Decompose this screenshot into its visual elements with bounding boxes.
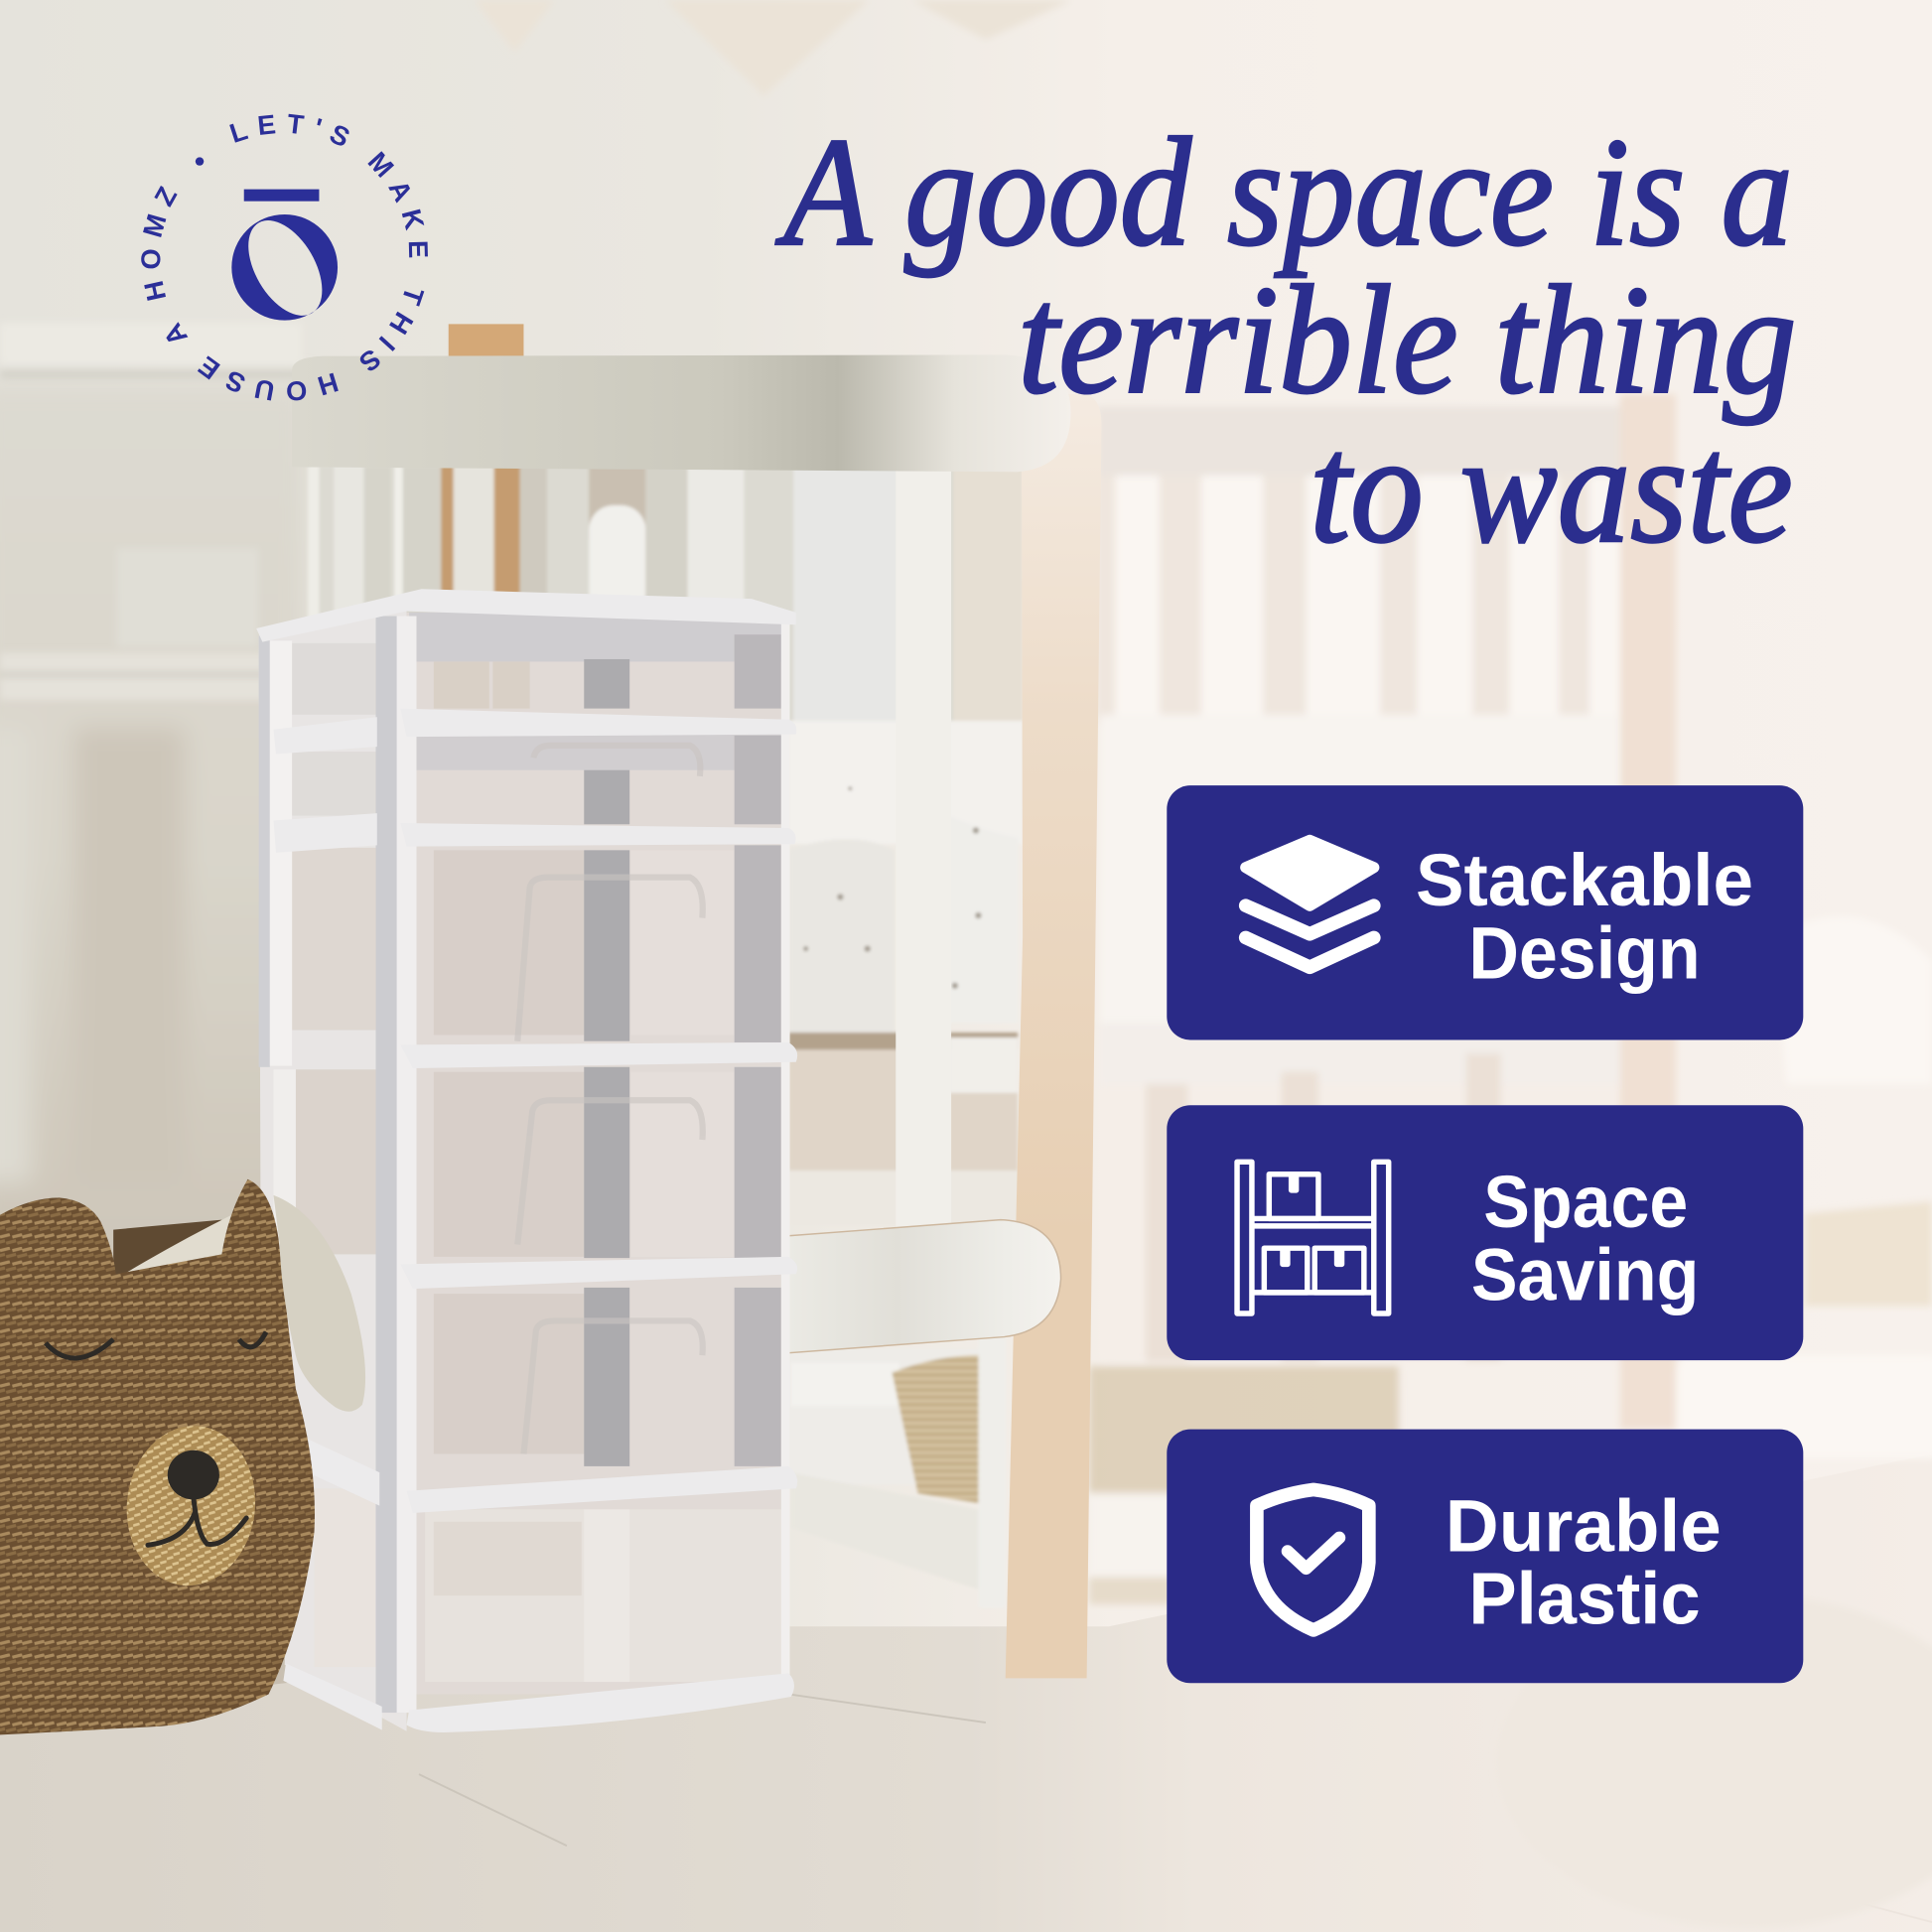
label: Durable <box>1446 1485 1722 1568</box>
under-shelf parts <box>788 1349 986 1484</box>
handles <box>517 746 703 1453</box>
crib top rail <box>292 354 1070 472</box>
title: to waste <box>1310 403 1793 575</box>
cloth inside basket <box>113 1220 221 1282</box>
label <box>1471 1161 1699 1315</box>
label: Space <box>1483 1161 1688 1243</box>
drawer rails <box>256 589 797 1732</box>
ring dot <box>196 157 204 166</box>
ring text <box>160 133 409 382</box>
top drawer tint <box>409 613 783 661</box>
muzzle <box>119 1420 263 1592</box>
center grey bar <box>584 659 629 1466</box>
cloth ear <box>274 1195 365 1412</box>
panel: space saving <box>1167 1105 1803 1360</box>
label: Design <box>1468 911 1701 994</box>
storage drawer tower <box>256 589 797 1732</box>
logo badge: LET'S MAKE THIS HOUSE A HOMZ <box>141 113 428 401</box>
icon: shelf with boxes <box>1237 1162 1389 1313</box>
side panels <box>259 604 407 1731</box>
right grey bar <box>735 634 781 1466</box>
eyes <box>46 1332 266 1358</box>
label <box>1446 1485 1722 1640</box>
label: Saving <box>1471 1233 1699 1315</box>
label: Plastic <box>1468 1558 1701 1640</box>
floor <box>0 1453 1932 1932</box>
crib interior <box>308 466 1023 1608</box>
panel: durable plastic <box>1167 1430 1803 1683</box>
front glass <box>407 613 788 1694</box>
label: Stackable <box>1416 839 1753 921</box>
title: A good space is a <box>775 106 1793 278</box>
basket body <box>0 1179 315 1734</box>
label <box>1416 839 1753 994</box>
nose and mouth <box>148 1450 246 1545</box>
icon: shield with check <box>1257 1489 1369 1630</box>
panel: stackable design <box>1167 785 1803 1039</box>
title: terrible thing <box>1018 254 1796 426</box>
slats <box>308 466 1023 737</box>
icon: stacked layers <box>1246 840 1374 967</box>
corner post <box>376 617 404 1713</box>
crib column <box>896 471 951 1235</box>
macrame decorations <box>475 0 1072 96</box>
logo mark <box>231 190 338 321</box>
crib bottom ring <box>788 1220 1061 1353</box>
title <box>775 106 1796 575</box>
peg <box>449 324 523 356</box>
mattress and pillow <box>788 721 1023 844</box>
left frame strips <box>270 640 292 1066</box>
wicker bear basket <box>0 1179 365 1734</box>
right frame <box>781 622 790 1694</box>
washed crib on right <box>1097 407 1657 476</box>
wood post <box>1006 394 1102 1678</box>
